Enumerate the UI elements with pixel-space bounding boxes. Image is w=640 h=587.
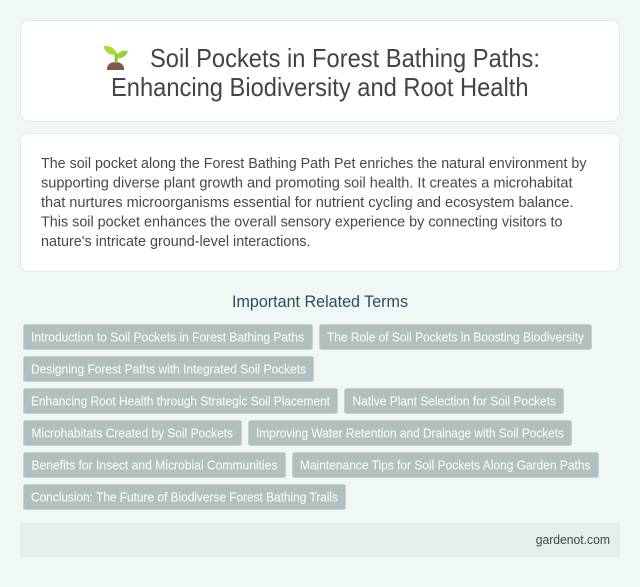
tag: maintenance tips	[292, 452, 598, 478]
description text	[41, 155, 587, 250]
icon: seedling	[104, 46, 128, 70]
tag: role of soil pockets: The Role of Soil Pockets in Boosting Biodiversity	[327, 330, 585, 344]
tag: introduction: Introduction to Soil Pockets in Forest Bathing Paths	[31, 330, 304, 344]
tag: microhabitats	[24, 420, 242, 446]
tag: designing forest paths	[24, 356, 314, 382]
description text: The soil pocket along the Forest Bathing Path Pet enriches the natural environment by	[41, 155, 587, 172]
description text: supporting diverse plant growth and promoting soil health. It creates a microhabitat	[41, 174, 573, 192]
tag: maintenance tips: Maintenance Tips for Soil Pockets Along Garden Paths	[300, 458, 590, 472]
title card	[20, 20, 620, 122]
tag: enhancing root health: Enhancing Root Health through Strategic Soil Placement	[31, 394, 330, 408]
tag: designing forest paths: Designing Forest Paths with Integrated Soil Pockets	[31, 362, 306, 376]
heading: important related terms: Important Related Terms	[232, 293, 408, 311]
tag: role of soil pockets	[320, 324, 592, 350]
tag: insect and microbial benefits	[24, 452, 286, 478]
tag: water retention	[248, 420, 572, 446]
tag: enhancing root health	[24, 388, 338, 414]
tag list	[24, 324, 598, 510]
description text: nature's intricate ground-level interactions.	[41, 233, 310, 250]
tag: introduction	[24, 324, 312, 350]
tag: native plant selection: Native Plant Selection for Soil Pockets	[352, 394, 556, 408]
tag: native plant selection	[344, 388, 564, 414]
tag: conclusion	[24, 484, 346, 510]
title text: Soil Pockets in Forest Bathing Paths:	[150, 43, 540, 73]
footer: gardenot.com	[536, 533, 610, 547]
tag: conclusion: Conclusion: The Future of Biodiverse Forest Bathing Trails	[31, 490, 338, 504]
title text: Enhancing Biodiversity and Root Health	[111, 72, 528, 102]
title text	[111, 43, 540, 102]
tag: insect and microbial benefits: Benefits for Insect and Microbial Communities	[32, 458, 278, 472]
tag: microhabitats: Microhabitats Created by Soil Pockets	[32, 426, 233, 440]
description text: that nurtures microorganisms essential for nutrient cycling and ecosystem balance.	[41, 194, 574, 211]
description text: This soil pocket enhances the overall sensory experience by connecting visitors to	[41, 214, 562, 230]
panel: description	[20, 134, 620, 272]
footer	[20, 523, 620, 557]
tag: water retention: Improving Water Retention and Drainage with Soil Pockets	[256, 426, 564, 440]
